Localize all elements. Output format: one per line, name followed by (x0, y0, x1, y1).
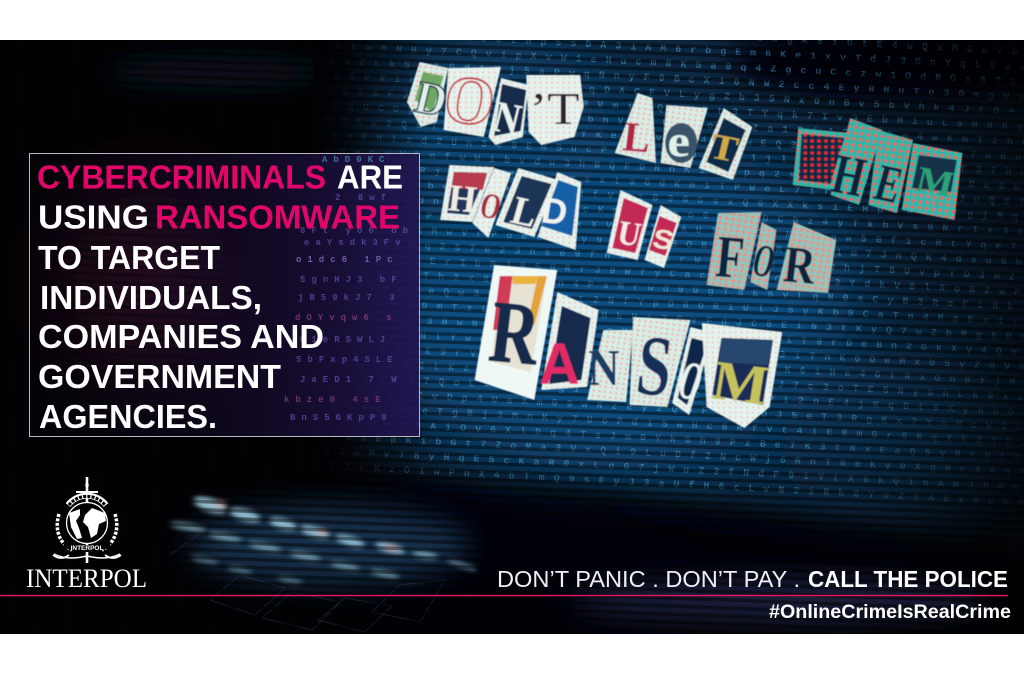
left glow and laptop body (70, 190, 230, 370)
letter E (868, 130, 913, 214)
ransom note: US (607, 190, 681, 268)
letter R: R (485, 282, 546, 384)
letter M: M (708, 350, 773, 417)
letter E: E (869, 153, 909, 214)
panel code characters: 5gnHJ3 bF (300, 275, 403, 285)
letter M: M (912, 159, 958, 205)
letter N: N (488, 92, 526, 144)
keyboard key outlines (170, 530, 445, 632)
banner text (64, 544, 110, 548)
letter N: N (588, 339, 619, 397)
headline text: AGENCIES. (39, 399, 217, 436)
letter D: D (410, 71, 452, 127)
letter L: L (506, 189, 542, 236)
letter F: F (713, 224, 747, 292)
panel code characters: kbze0 4sE (284, 395, 387, 405)
letter T: T (706, 126, 742, 170)
text panel (30, 154, 420, 436)
headline text: INDIVIDUALS, (40, 280, 262, 317)
panel code characters: JaED1 7 W (300, 375, 403, 385)
letter O (672, 327, 713, 415)
ransom note collage (407, 61, 963, 428)
letter H (826, 118, 882, 209)
panel code characters (284, 155, 414, 423)
slogan: CALL THE POLICE (808, 566, 1008, 592)
INTERPOL wordmark: INTERPOL (26, 564, 147, 593)
headline text: CYBERCRIMINALS (37, 160, 326, 196)
slogan (497, 566, 1008, 592)
letter N (587, 330, 633, 402)
letter e: e (667, 118, 690, 166)
panel code characters: BnS5GKpP9 (290, 413, 393, 423)
panel code characters: dOYvqw6 s (295, 313, 398, 323)
continents (69, 509, 82, 539)
panel code characters: eaYsdk3Fv (304, 238, 407, 248)
letter H: H (826, 143, 872, 209)
headline text: GOVERNMENT (38, 359, 282, 396)
letter L: L (620, 113, 653, 162)
hashtag: #OnlineCrimeIsRealCrime (769, 602, 1011, 623)
ransom note: HOLD (440, 165, 581, 250)
letter M (902, 143, 963, 220)
letter R: R (781, 235, 819, 296)
panel code characters: AbD0KC (322, 155, 390, 165)
overlay shading on screen (390, 466, 649, 518)
letter D (538, 172, 581, 250)
letter S: S (632, 317, 677, 416)
ransom note: FOR (707, 212, 836, 296)
keyboard highlights (170, 494, 478, 586)
globe (66, 502, 108, 544)
ransom note: LET (615, 93, 752, 180)
headline text: COMPANIES AND (38, 319, 324, 356)
letter apostrophe T: ’T (530, 83, 580, 134)
letter A: A (539, 332, 580, 397)
letter apostrophe T (526, 75, 584, 145)
letter O: O (748, 235, 780, 288)
top band (68, 496, 106, 505)
headline text (37, 160, 403, 436)
letter R (475, 265, 557, 400)
headline text: ARE (337, 160, 403, 196)
ransom note: RANSOM (475, 265, 782, 428)
scales (54, 554, 120, 558)
letter O (472, 168, 511, 238)
panel background (30, 154, 420, 436)
letter M (702, 323, 782, 428)
panel code characters: jB59kJ7 3 (298, 293, 401, 303)
letter H: H (446, 176, 479, 221)
letter O: O (672, 351, 709, 413)
laurels (57, 514, 72, 550)
headline text: TO TARGET (38, 240, 221, 277)
headline text: RANSOMWARE (155, 200, 400, 236)
icon: INTERPOL emblem (53, 477, 121, 563)
letter T (793, 128, 850, 190)
panel code characters: P1eRSWLJ (300, 335, 391, 345)
letter H (440, 165, 494, 222)
sword (86, 477, 88, 563)
letter U: U (614, 214, 644, 255)
pink divider line (0, 595, 1008, 596)
letter L (495, 168, 558, 237)
letter D: D (539, 190, 570, 233)
letter S: S (650, 224, 676, 257)
ransom note: DON'T (407, 61, 584, 145)
letter O: O (439, 61, 500, 141)
ransom note: THEM (793, 118, 963, 220)
panel code characters: 5bFxp4SLE (296, 355, 399, 365)
letter A (539, 292, 599, 397)
icon: INTERPOL emblem: INTERPOL (71, 545, 103, 552)
letter O: O (476, 185, 505, 227)
slogan: DON’T PANIC . DON’T PAY . (497, 566, 800, 592)
matrix code characters on screen (324, 40, 1024, 505)
panel code characters: 8Ft yo6 ob (300, 226, 414, 236)
panel code characters: 2 8wf (335, 193, 392, 203)
panel code characters: o1dc6 1Pc (296, 255, 399, 265)
headline text: USING (38, 200, 149, 236)
